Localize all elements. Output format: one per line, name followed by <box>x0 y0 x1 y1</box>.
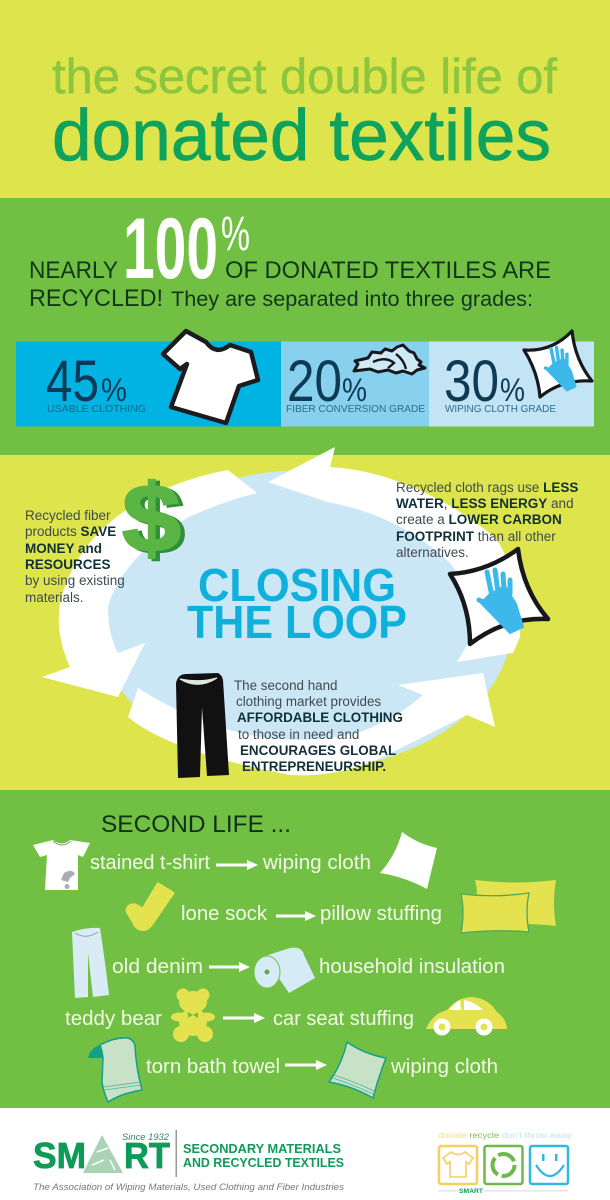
text: fiber products: products SAVE <box>25 524 116 539</box>
bar: usable clothing 45%: 45 <box>46 349 99 414</box>
row: stained t-shirt: wiping cloth <box>262 852 371 874</box>
bar: fiber conversion 20%: 20 <box>287 349 342 414</box>
text: second hand market <box>234 678 403 774</box>
text: cloth rags: create a LOWER CARBON <box>396 512 562 527</box>
title line one: the secret double life of <box>52 50 557 104</box>
panel: footer <box>0 1108 610 1200</box>
text: cloth rags: FOOTPRINT than all other <box>396 529 556 544</box>
text: second hand market: clothing market provides <box>236 694 381 709</box>
row: torn bath towel: torn bath towel <box>146 1056 280 1078</box>
icon: black trousers <box>176 673 229 778</box>
row: lone sock: lone sock <box>181 903 268 925</box>
panel: closing the loop <box>0 447 610 790</box>
panel: three grades <box>0 198 610 455</box>
arrow: top right <box>268 447 520 662</box>
panel: second life <box>0 790 610 1108</box>
row: stained t-shirt: stained t-shirt <box>90 852 210 874</box>
logo: SMART <box>33 1132 170 1176</box>
text: second hand market: AFFORDABLE CLOTHING <box>237 710 403 725</box>
heading: second life: SECOND LIFE ... <box>101 811 291 838</box>
heading: closing the loop <box>187 559 407 648</box>
logo: SMART: Since 1932 <box>122 1132 170 1143</box>
icon: dollar sign: $ <box>122 465 181 572</box>
bar: wiping cloth 30%: WIPING CLOTH GRADE <box>445 403 556 415</box>
icon: dollar sign: $ <box>126 467 185 574</box>
cloud fibre lines <box>373 354 406 369</box>
row: lone sock: pillow stuffing <box>320 903 442 925</box>
bar: usable clothing 45%: USABLE CLOTHING <box>47 403 146 415</box>
bar: wiping cloth 30%: % <box>500 372 525 408</box>
bar: usable clothing 45%: % <box>101 372 127 408</box>
text: second hand market: ENCOURAGES GLOBAL <box>240 743 396 758</box>
logo: donate recycle <box>438 1131 572 1195</box>
logo: donate recycle: donate recycle don't throw away <box>438 1131 572 1140</box>
row: teddy bear: teddy bear <box>65 1008 162 1030</box>
text: second hand market: ENTREPRENEURSHIP. <box>242 759 386 774</box>
text: fiber products: RESOURCES <box>25 557 111 572</box>
row: torn bath towel: wiping cloth <box>390 1056 498 1078</box>
row: lone sock <box>127 880 556 933</box>
text: cloth rags <box>396 480 578 560</box>
text: cloth rags: WATER, LESS ENERGY and <box>396 496 574 511</box>
row: teddy bear: car seat stuffing <box>273 1008 414 1030</box>
arrow: bottom <box>128 673 495 775</box>
logo name: SECONDARY MATERIALS <box>183 1141 341 1156</box>
row: torn bath towel <box>88 1038 498 1102</box>
bar: usable clothing 45% <box>16 342 281 426</box>
text: fiber products: by using existing <box>25 573 125 588</box>
text: fiber products <box>25 508 125 605</box>
tagline: The Association of Wiping Materials, Used Clothing and Fiber Industries <box>33 1181 344 1192</box>
title line two: donated textiles <box>52 96 551 176</box>
text: cloth rags: alternatives. <box>396 545 469 560</box>
row: teddy bear <box>65 988 507 1042</box>
text: second hand market: The second hand <box>234 678 337 693</box>
logo name: AND RECYCLED TEXTILES <box>183 1155 344 1170</box>
logo name <box>176 1130 344 1177</box>
pale loop centre <box>97 470 513 770</box>
icon: fiber cloud <box>354 345 425 374</box>
logo: SMART: RT <box>124 1135 170 1176</box>
text: fiber products: materials. <box>25 590 84 605</box>
heading: nearly 100 percent: % <box>221 208 250 261</box>
arrow: left <box>42 470 257 697</box>
bar: fiber conversion 20% <box>281 342 429 426</box>
heading: nearly 100 percent <box>29 201 551 312</box>
heading: closing the loop: CLOSING <box>198 559 396 611</box>
bar: fiber conversion 20%: % <box>342 372 367 408</box>
icon: large wiping cloth with glove <box>450 549 548 644</box>
row: old denim <box>72 928 505 998</box>
icon: white t-shirt <box>163 331 258 423</box>
heading: closing the loop: THE LOOP <box>187 596 407 648</box>
text: fiber products: Recycled fiber <box>25 508 111 523</box>
logo: donate recycle: SMART <box>459 1188 483 1195</box>
text: second hand market: to those in need and <box>238 727 359 742</box>
heading: nearly 100 percent: They are separated into three grades: <box>171 288 533 311</box>
heading: nearly 100 percent: RECYCLED! <box>29 285 163 312</box>
logo: SMART: SM <box>33 1135 86 1176</box>
text: fiber products: MONEY and <box>25 541 102 556</box>
bar: wiping cloth 30%: 30 <box>444 349 499 414</box>
panel: title band <box>0 0 610 198</box>
bar: wiping cloth 30% <box>429 342 594 426</box>
bar: fiber conversion 20%: FIBER CONVERSION GRADE <box>286 403 425 415</box>
row: stained t-shirt <box>33 832 437 890</box>
heading: nearly 100 percent: NEARLY <box>29 257 118 284</box>
heading: nearly 100 percent: OF DONATED TEXTILES ARE <box>225 257 551 284</box>
text: cloth rags: Recycled cloth rags use LESS <box>396 480 578 495</box>
row: old denim: old denim <box>112 956 203 978</box>
row: old denim: household insulation <box>319 956 505 978</box>
heading: nearly 100 percent: 100 <box>123 201 218 297</box>
icon: small wiping cloth with glove <box>524 331 592 397</box>
